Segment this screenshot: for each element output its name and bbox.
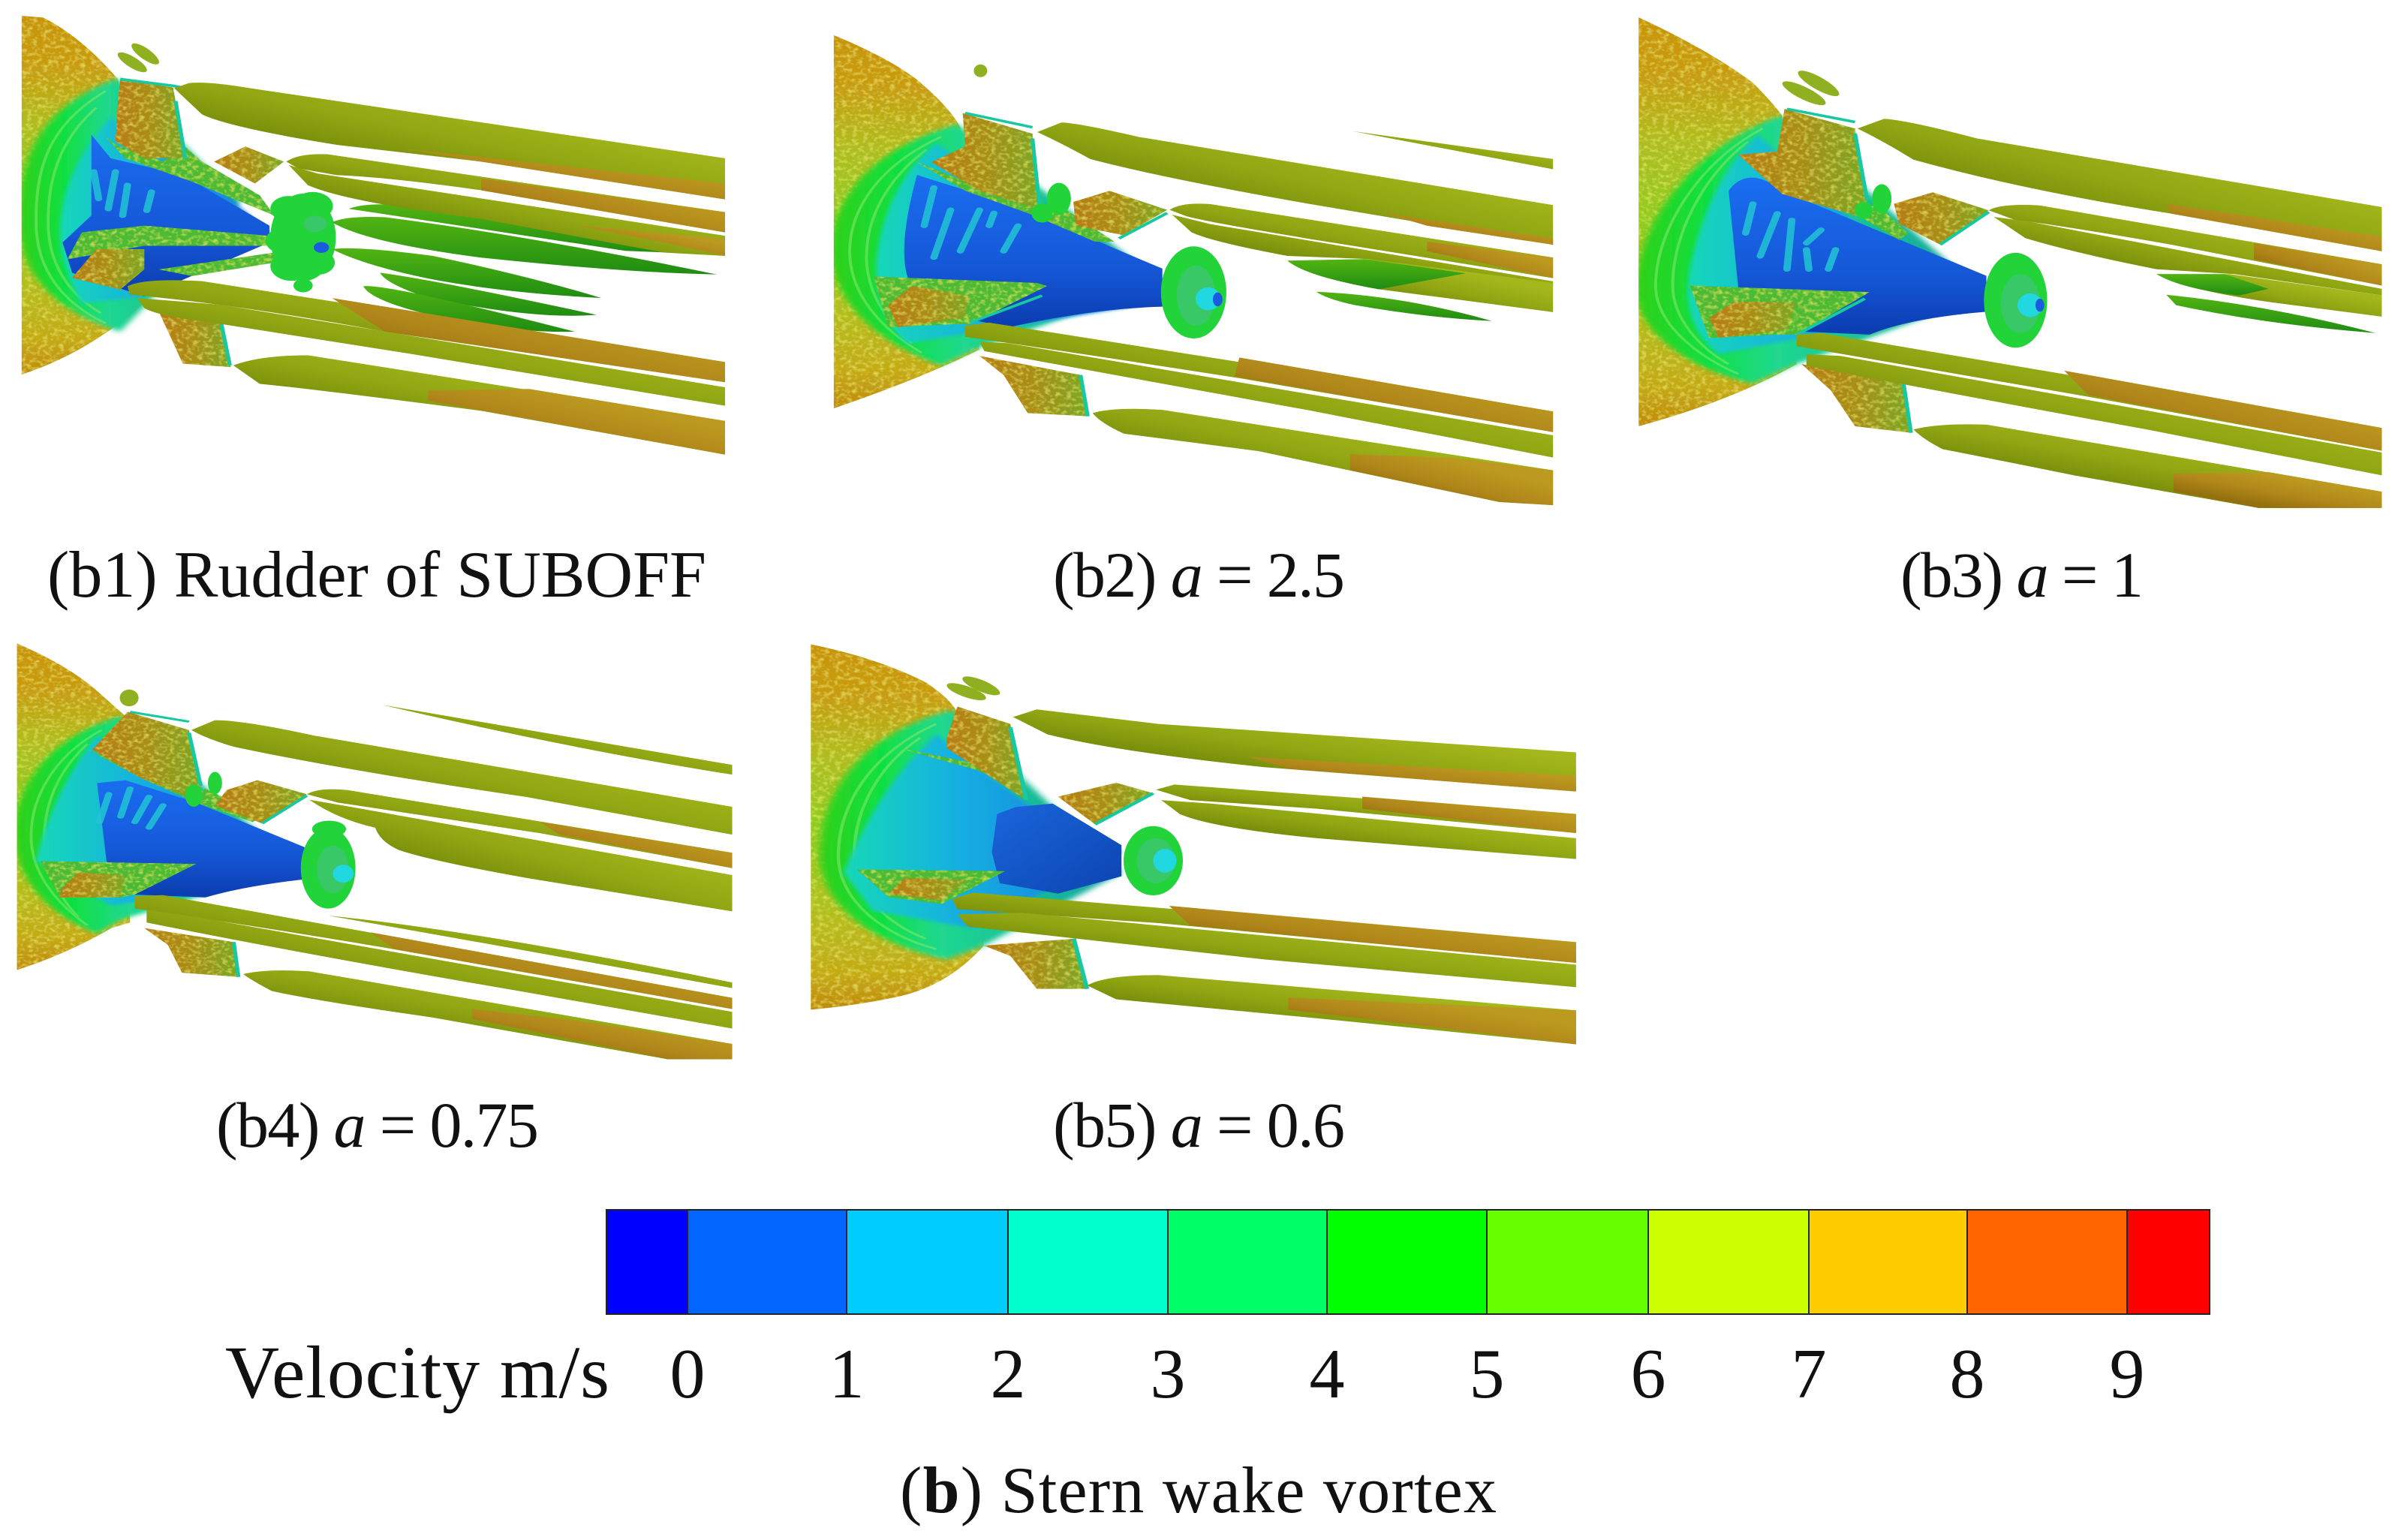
legend: velocity label and ticks: 2 [991, 1335, 1025, 1413]
blobs beside fin [185, 772, 222, 807]
legend: velocity label and ticks: 0 [669, 1335, 706, 1413]
legend: velocity colour bar [606, 1210, 2210, 1314]
legend: velocity label and ticks: 1 [829, 1335, 865, 1413]
wake leaf vortices [1316, 292, 1492, 321]
legend: velocity label and ticks: 6 [1630, 1335, 1666, 1413]
panel: b1 rudder of SUBOFF wake render [20, 16, 725, 455]
hull: stern body with blue cone [20, 16, 284, 374]
panel: b2 a = 2.5 wake render [832, 35, 1553, 505]
legend: velocity label and ticks: 4 [1309, 1335, 1345, 1413]
wake leaf vortices [2166, 295, 2375, 333]
hull: stern body with blue cone [811, 644, 1154, 1009]
small upper wake vortices [120, 690, 139, 706]
rudder tip vortex tubes [1797, 119, 2381, 508]
legend: velocity label and ticks: Velocity m/s [225, 1331, 609, 1414]
propeller hub vortex [1984, 253, 2047, 347]
caption: b3: (b3) a = 1 [1900, 539, 2144, 611]
propeller hub vortex [1124, 826, 1183, 895]
rudder tip vortex tubes [135, 705, 733, 1059]
wake leaf vortices [332, 204, 717, 332]
legend: velocity label and ticks: 5 [1470, 1335, 1504, 1413]
legend: velocity label and ticks [225, 1331, 2145, 1414]
propeller hub vortex [301, 821, 356, 909]
small upper wake vortices [943, 673, 1004, 703]
legend: velocity label and ticks: 8 [1950, 1335, 1984, 1413]
blobs beside fin [1031, 183, 1071, 223]
hull: stern body with blue cone [14, 643, 307, 977]
caption: b1: (b1) Rudder of SUBOFF [47, 539, 706, 612]
small upper wake vortices [114, 41, 163, 75]
panel: b5 a = 0.6 wake render [811, 644, 1576, 1044]
legend: velocity label and ticks: 9 [2109, 1335, 2145, 1413]
blobs beside fin [1855, 184, 1891, 219]
legend: velocity label and ticks: 7 [1791, 1335, 1827, 1413]
small upper wake vortices [1778, 68, 1844, 109]
caption: b4: (b4) a = 0.75 [216, 1089, 539, 1161]
rudder tip vortex tubes [128, 83, 725, 455]
caption: b5: (b5) a = 0.6 [1053, 1089, 1345, 1161]
hull: stern body with blue cone [1636, 17, 1989, 433]
hull: stern body with blue cone [832, 35, 1167, 417]
panel: b4 a = 0.75 wake render [14, 643, 733, 1059]
propeller hub vortex [266, 192, 335, 292]
legend: velocity label and ticks: 3 [1150, 1335, 1186, 1413]
figure caption: (b) Stern wake vortex [900, 1454, 1497, 1527]
rudder tip vortex tubes [952, 709, 1576, 1044]
rudder tip vortex tubes [965, 122, 1553, 505]
small upper wake vortices [973, 65, 987, 77]
caption: b2: (b2) a = 2.5 [1053, 539, 1345, 611]
panel: b3 a = 1 wake render [1636, 17, 2381, 508]
propeller hub vortex [1161, 246, 1226, 338]
